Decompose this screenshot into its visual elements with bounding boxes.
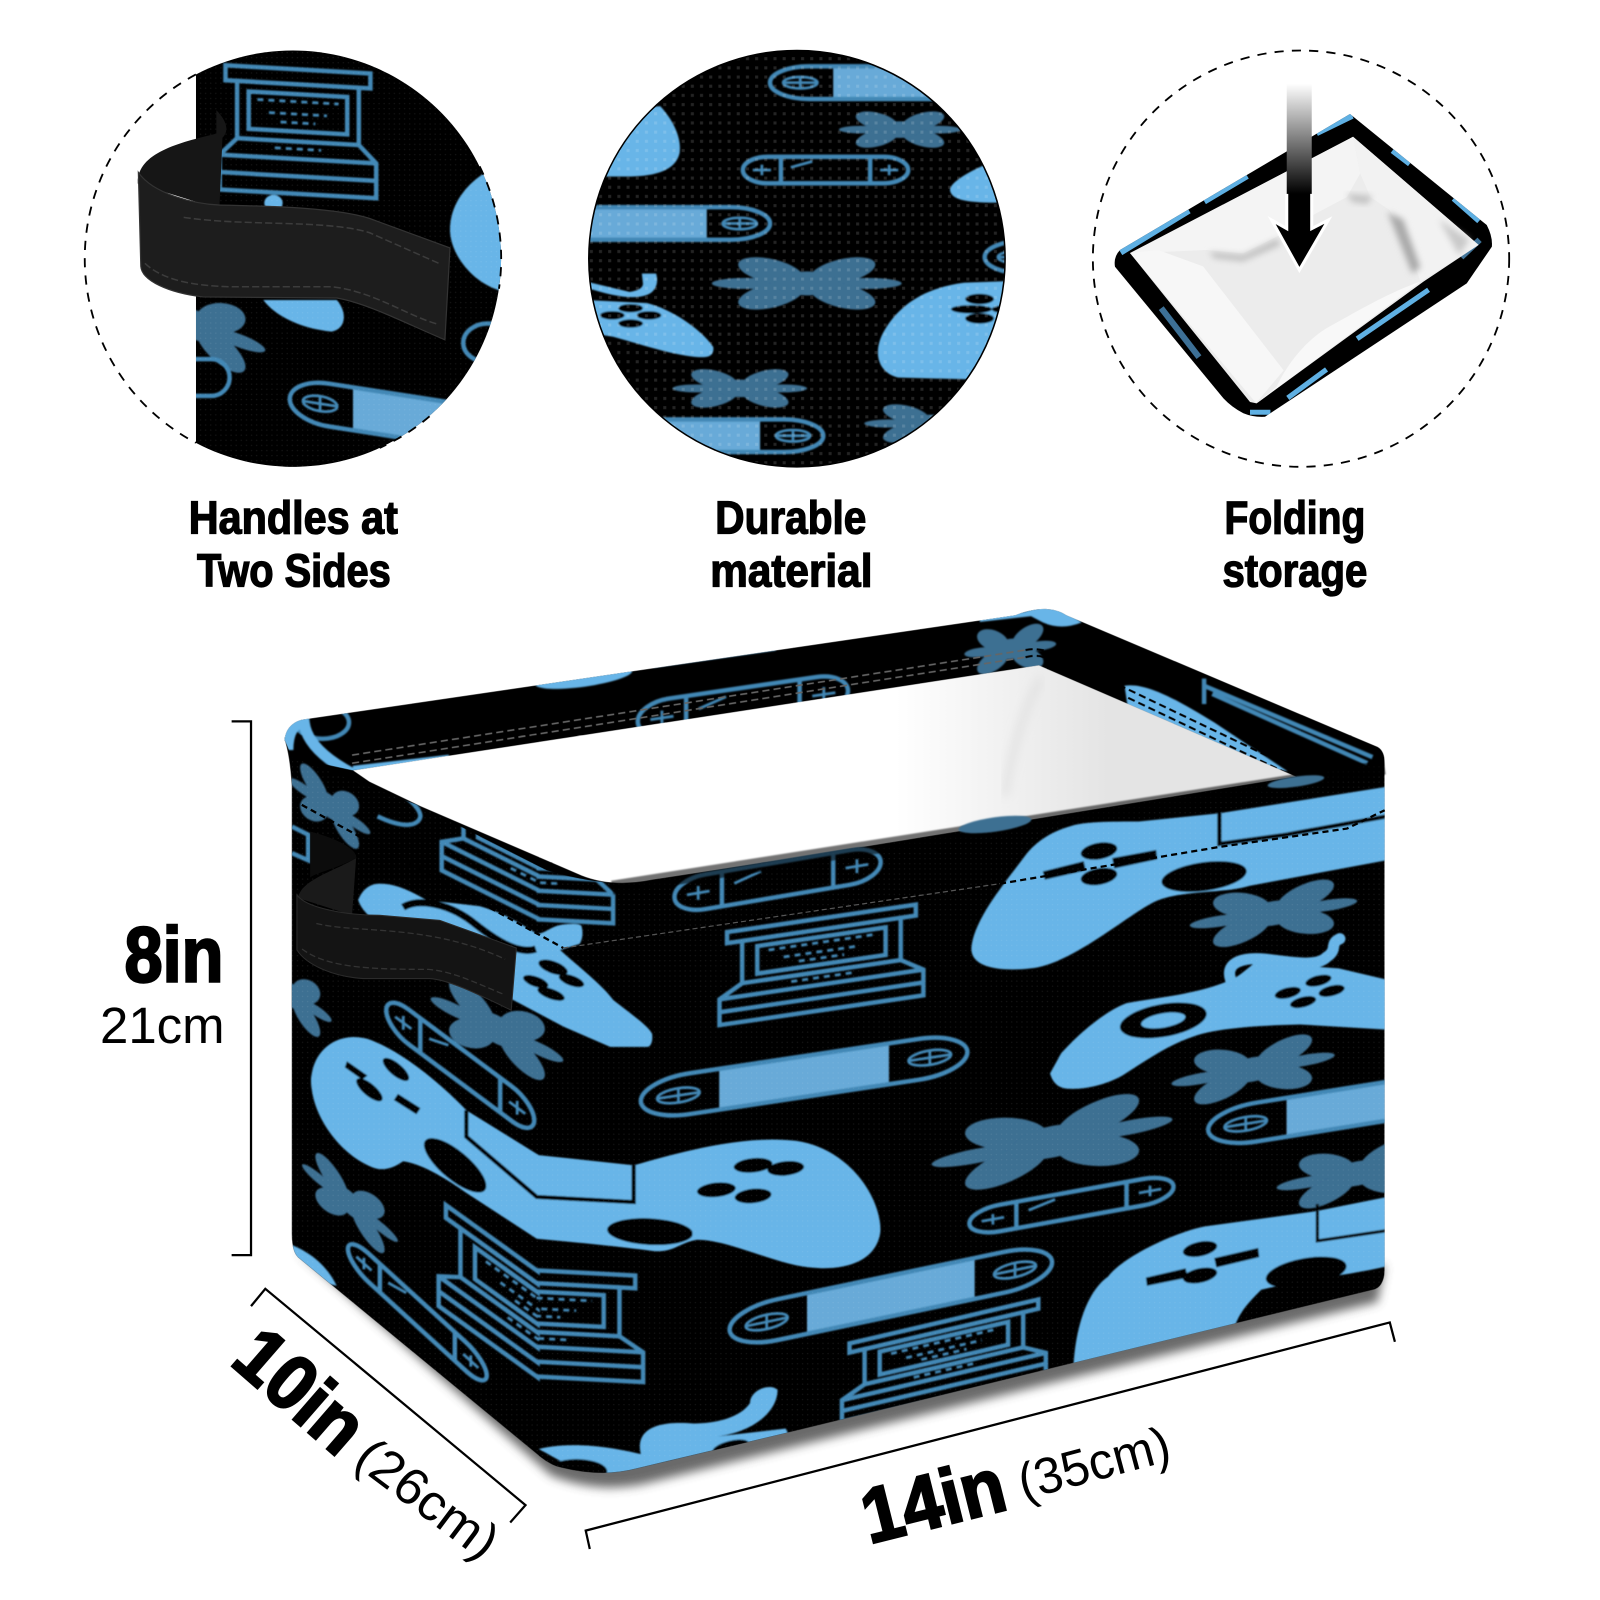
icon: blob right (949, 165, 997, 204)
depth label: 10in (217, 1311, 383, 1471)
icon: partial handheld top left (367, 781, 420, 825)
icon: controller ring (1117, 997, 1209, 1044)
folded basket blue edges (1120, 115, 1480, 412)
icon: controller bottom (539, 1387, 796, 1490)
fold shadows (1388, 212, 1420, 273)
icon: handheld on back wall (634, 673, 852, 727)
inner stitching (352, 650, 1026, 763)
icon: blob top left (606, 105, 682, 178)
controller bottom right rectangle line (1317, 1204, 1387, 1241)
icon: flower (196, 302, 266, 374)
controller handheld line (1219, 811, 1387, 844)
icon: arcade lower left (439, 1200, 635, 1447)
dashed circle outline left and right arcs (85, 74, 501, 448)
icon: flower top left (289, 747, 370, 865)
height dimension bracket (232, 721, 251, 1255)
icon: controller top right body (971, 787, 1387, 969)
circle outline (589, 51, 1005, 467)
icon: arcade on rim right (467, 813, 613, 923)
icon: handheld top (766, 62, 933, 102)
folded basket rim (1115, 114, 1492, 417)
icon: arcade on rim left (442, 768, 638, 968)
icon: arcade front (719, 903, 923, 1025)
arrow pointing down (1272, 84, 1328, 270)
icon: blob on right wall (1124, 685, 1288, 771)
icon: arcade lower right (430, 1265, 643, 1382)
panel: durable material (507, 41, 1248, 480)
icon: circle at left corner (296, 706, 349, 739)
basket interior lining (353, 665, 1296, 883)
icon: arcade bottom (842, 1298, 1046, 1422)
icon: big flower (932, 1077, 1172, 1207)
icon: controller blob under handle (263, 300, 344, 332)
icon: blob on back rim (534, 671, 634, 690)
icon: controller crossing d-pad and buttons (345, 1054, 805, 1247)
label: folding storage (1222, 492, 1367, 597)
label: durable material: material (710, 545, 872, 597)
icon: arcade lines on right wall (1204, 679, 1372, 763)
icon: controller cable (1230, 939, 1340, 980)
bottom lining flap (1257, 282, 1420, 403)
icon: flower centre (711, 256, 902, 311)
width dimension bracket (586, 1322, 1395, 1549)
fabric close-up circle (590, 51, 1004, 466)
icon: handle strap front (138, 172, 450, 340)
left lining flap (1130, 250, 1284, 403)
controller loop detail (403, 903, 536, 950)
icon: flower bottom right (864, 403, 934, 444)
icon: handheld near rim (674, 845, 881, 914)
icon: blob bottom left corner (292, 1245, 337, 1286)
icon: controller cable (587, 273, 657, 297)
height label (100, 913, 224, 1054)
controller band outline (466, 1110, 634, 1202)
icon: controller top right d-pad (1043, 840, 1249, 897)
icon: flower top right (838, 110, 960, 149)
icon: d-pad right (950, 292, 999, 325)
seam stitching (293, 800, 1385, 948)
folded basket interior floor (1130, 137, 1479, 403)
fabric close-up with handle (196, 50, 502, 467)
icon: controller bottom hole (546, 1459, 607, 1484)
icon: flower upper right (1190, 868, 1357, 958)
icon: controller bottom button (711, 1437, 750, 1457)
height label: 21cm (100, 997, 224, 1054)
panel: folding storage (1093, 51, 1509, 467)
depth label (217, 1311, 510, 1570)
lining folds (1130, 137, 1479, 403)
rim highlight top (653, 610, 1061, 665)
icon: flower far left (250, 937, 332, 1053)
icon: side handle back (298, 832, 356, 915)
icon: handheld left face (386, 993, 534, 1138)
icon: partial screen far left (292, 827, 308, 860)
width label: (35cm) (1012, 1415, 1176, 1511)
strip by floor (353, 757, 449, 768)
icon: flower lower left (302, 1133, 398, 1273)
icon: controller upper left behind handle (358, 884, 652, 1047)
icon: controller buttons left (522, 956, 586, 1004)
icon: handheld lower left (348, 1235, 487, 1390)
icon: controller crossing the corner (311, 1037, 881, 1268)
icon: flower right edge (1277, 1127, 1438, 1220)
label: handles at two sides: Handles at (189, 492, 398, 544)
panel: handles at two sides (84, 50, 502, 467)
icon: controller right (876, 280, 1004, 380)
height label: 8in (124, 913, 223, 999)
icon: side handle front (297, 895, 516, 1010)
icon: corner blob (1023, 608, 1082, 627)
label: folding storage: storage (1222, 545, 1367, 597)
icon: handheld partial (196, 356, 233, 400)
icon: flower low (672, 368, 808, 409)
icon: controller blob right (448, 174, 502, 292)
icon: small blob (264, 195, 283, 211)
icon: handheld filled front (641, 1032, 967, 1121)
width label: 14in (853, 1442, 1014, 1560)
label: folding storage: Folding (1224, 492, 1365, 544)
basket: main product (284, 608, 1390, 1530)
upper lining band (1130, 137, 1360, 253)
label: handles at two sides: Two Sides (197, 545, 391, 597)
basket silhouette (285, 609, 1385, 1473)
panel: front and side faces pattern (250, 714, 1535, 1490)
depth label: (26cm) (345, 1427, 510, 1570)
label: durable material: Durable (715, 492, 866, 544)
icon: handheld right (1208, 1058, 1535, 1149)
icon: handle strap back (138, 110, 226, 209)
rim top shade (612, 767, 1385, 888)
icon: small circle right (981, 240, 1004, 274)
icon: controller bottom right d-pad (1146, 1238, 1349, 1294)
icon: controller bottom right (1073, 1197, 1387, 1365)
icon: rim blobs (958, 773, 1325, 837)
handle stitching (145, 217, 439, 324)
icon: controller left (587, 300, 713, 357)
depth dimension bracket (251, 1289, 526, 1522)
label: handles at two sides (189, 492, 398, 597)
panel: inner walls pattern (288, 608, 1372, 773)
icon: controller middle right (1050, 957, 1387, 1089)
icon: flower left face (431, 960, 563, 1099)
icon: handheld empty lower (969, 1173, 1173, 1237)
left corner strip (288, 722, 352, 773)
width label (853, 1415, 1176, 1560)
icon: arcade cabinet (220, 65, 376, 198)
dashed circle outline (1093, 51, 1509, 467)
right lining fold (1353, 137, 1479, 282)
icon: handheld filled (286, 380, 447, 440)
icon: handheld right (460, 320, 492, 362)
icon: flower middle right (1171, 1023, 1335, 1116)
icon: handheld left (590, 204, 774, 244)
icon: handheld filled bottom (730, 1242, 1052, 1350)
icon: controller buttons left (600, 304, 661, 328)
basket shadow (296, 1250, 1385, 1488)
handle stitching (302, 923, 505, 995)
icon: handheld empty (743, 157, 908, 183)
label: durable material (710, 492, 872, 597)
lining crease (1005, 679, 1041, 796)
icon: flower at back corner (964, 622, 1057, 674)
icon: controller buttons (1274, 972, 1346, 1010)
icon: handheld bottom (662, 416, 827, 456)
